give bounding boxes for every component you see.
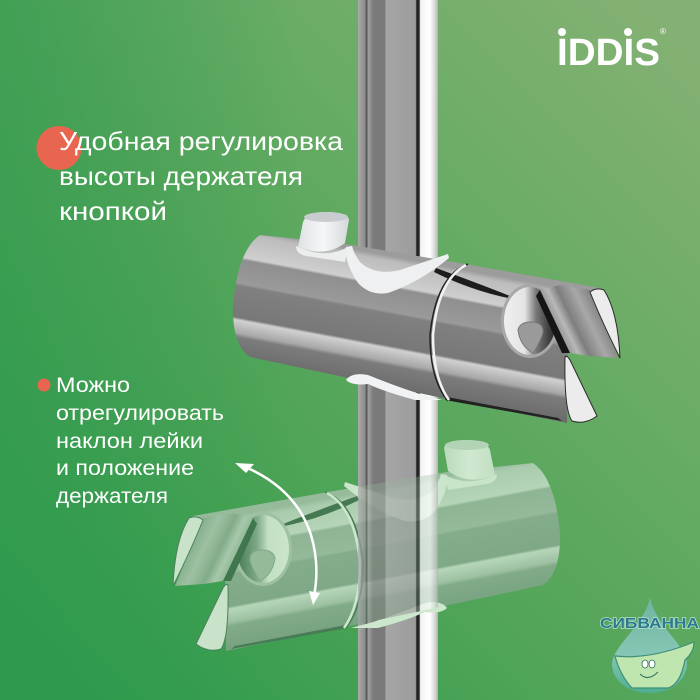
note text: Можно: [56, 374, 130, 397]
main chrome holder: [233, 212, 620, 423]
heading: высоты держателя: [59, 161, 303, 191]
bullet dot: [38, 378, 50, 392]
watermark: [600, 597, 699, 693]
heading: кнопкой: [59, 196, 167, 226]
note text: держателя: [56, 485, 168, 508]
heading: Удобная регулировка: [59, 126, 344, 156]
watermark: СИБВАННА: [600, 615, 699, 632]
note text: и положение: [56, 457, 194, 480]
ghost holder: [173, 440, 560, 651]
chrome rod: [358, 0, 438, 700]
note text: наклон лейки: [56, 430, 203, 453]
accent blob behind heading: [36, 126, 82, 170]
note text: отрегулировать: [56, 402, 224, 425]
rotation arrow: [235, 463, 320, 605]
logo: ®: [660, 27, 666, 36]
logo: IDDIS: [557, 32, 660, 74]
rod seen through ghost holder: [358, 470, 438, 630]
